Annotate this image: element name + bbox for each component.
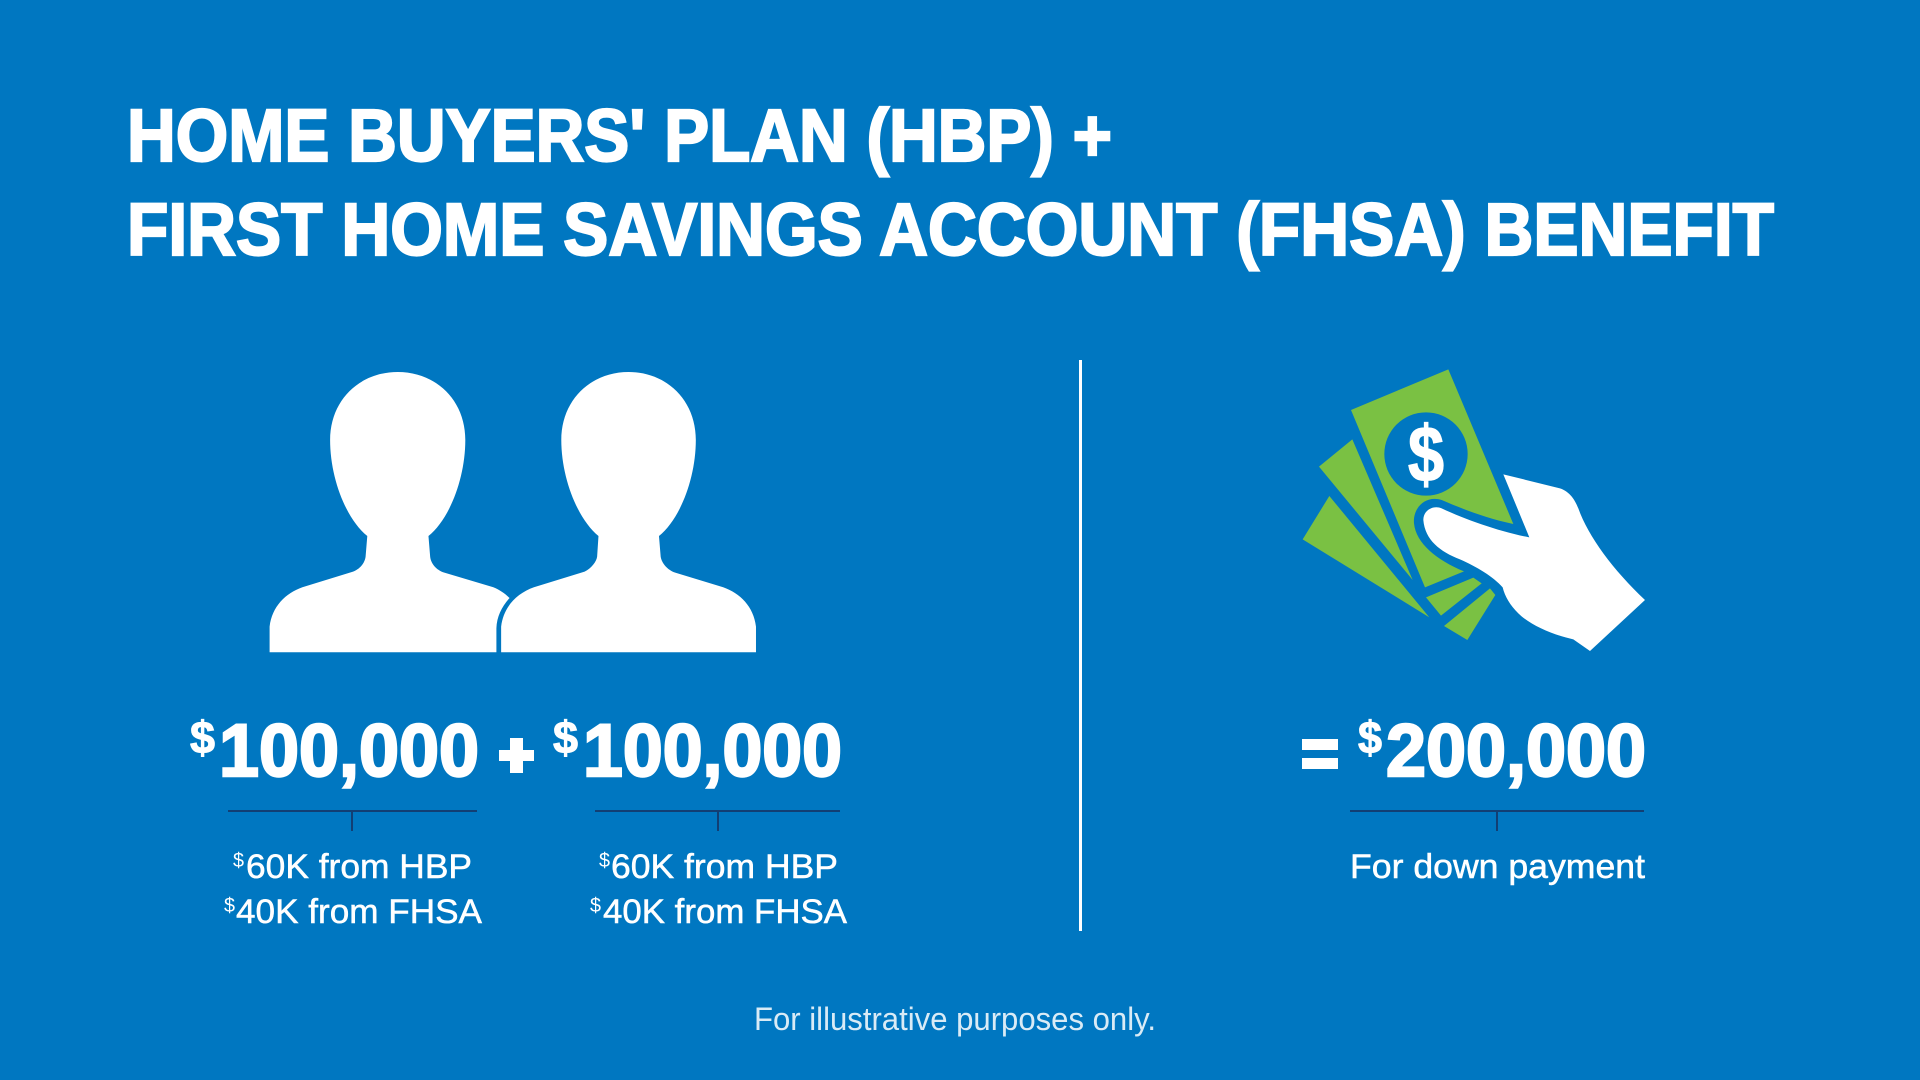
first amount: $100,000: $ — [190, 712, 215, 763]
total amount: $200,000: $ — [1358, 712, 1382, 763]
breakdown: second person: 60K from HBP — [611, 848, 838, 886]
icon: hand holding money — [1303, 369, 1645, 651]
hand — [1423, 474, 1645, 651]
footnote: For illustrative purposes only. — [754, 1001, 1156, 1037]
breakdown: first person: 60K from HBP — [246, 848, 472, 886]
breakdown: first person: $ — [233, 850, 244, 872]
equals sign — [1302, 739, 1338, 769]
vertical divider — [1079, 360, 1082, 931]
breakdown: second person — [590, 848, 847, 931]
back bill — [1303, 496, 1429, 617]
title — [127, 94, 1774, 271]
breakdown: second person: $ — [590, 895, 601, 917]
down payment label: For down payment — [1350, 848, 1646, 886]
bracket: first amount — [228, 810, 477, 831]
total amount: $200,000: 200,000 — [1386, 709, 1646, 792]
breakdown: first person: $ — [224, 895, 235, 917]
front bill — [1351, 369, 1513, 587]
icon: two people silhouettes — [270, 372, 756, 652]
dollar sign: $ — [1408, 409, 1444, 498]
second amount: $100,000: 100,000 — [583, 709, 842, 792]
bracket: total — [1350, 810, 1644, 831]
breakdown: first person — [224, 848, 482, 931]
plus sign — [499, 738, 534, 773]
breakdown: first person: 40K from FHSA — [236, 893, 482, 931]
breakdown: second person: 40K from FHSA — [603, 893, 847, 931]
middle bill — [1319, 439, 1413, 580]
bill corner pieces — [1426, 578, 1495, 640]
breakdown: second person: $ — [599, 850, 610, 872]
title: HOME BUYERS' PLAN (HBP) + — [127, 94, 1112, 177]
dollar coin — [1384, 412, 1468, 496]
bracket: second amount — [595, 810, 840, 831]
first amount: $100,000: 100,000 — [219, 709, 479, 792]
second amount: $100,000: $ — [553, 712, 578, 763]
title: FIRST HOME SAVINGS ACCOUNT (FHSA) BENEFIT — [127, 188, 1774, 271]
